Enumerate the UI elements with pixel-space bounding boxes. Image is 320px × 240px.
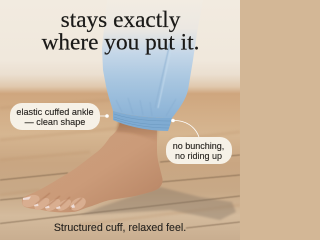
caption: Structured cuff, relaxed feel. xyxy=(54,222,186,234)
toenails xyxy=(23,196,75,209)
callout: no bunching: no riding up xyxy=(175,151,222,161)
callout: no bunching xyxy=(166,119,232,164)
ankle shadow under cuff xyxy=(116,120,158,142)
title xyxy=(42,7,199,56)
gathers xyxy=(116,98,176,116)
pants leg xyxy=(102,0,203,118)
callout: elastic cuffed ankle: elastic cuffed ankle xyxy=(16,107,94,117)
background: wall and wooden floor xyxy=(0,0,240,240)
callout: elastic cuffed ankle xyxy=(10,103,109,130)
title: where you put it. xyxy=(42,30,199,56)
seam xyxy=(155,43,170,108)
icon: bare foot xyxy=(21,120,163,213)
callout: no bunching: no bunching, xyxy=(173,141,224,151)
callout: elastic cuffed ankle: — clean shape xyxy=(25,117,85,127)
elastic cuff xyxy=(113,111,172,131)
foot shadow xyxy=(80,187,236,220)
title: stays exactly xyxy=(61,7,181,33)
toes xyxy=(21,193,88,213)
